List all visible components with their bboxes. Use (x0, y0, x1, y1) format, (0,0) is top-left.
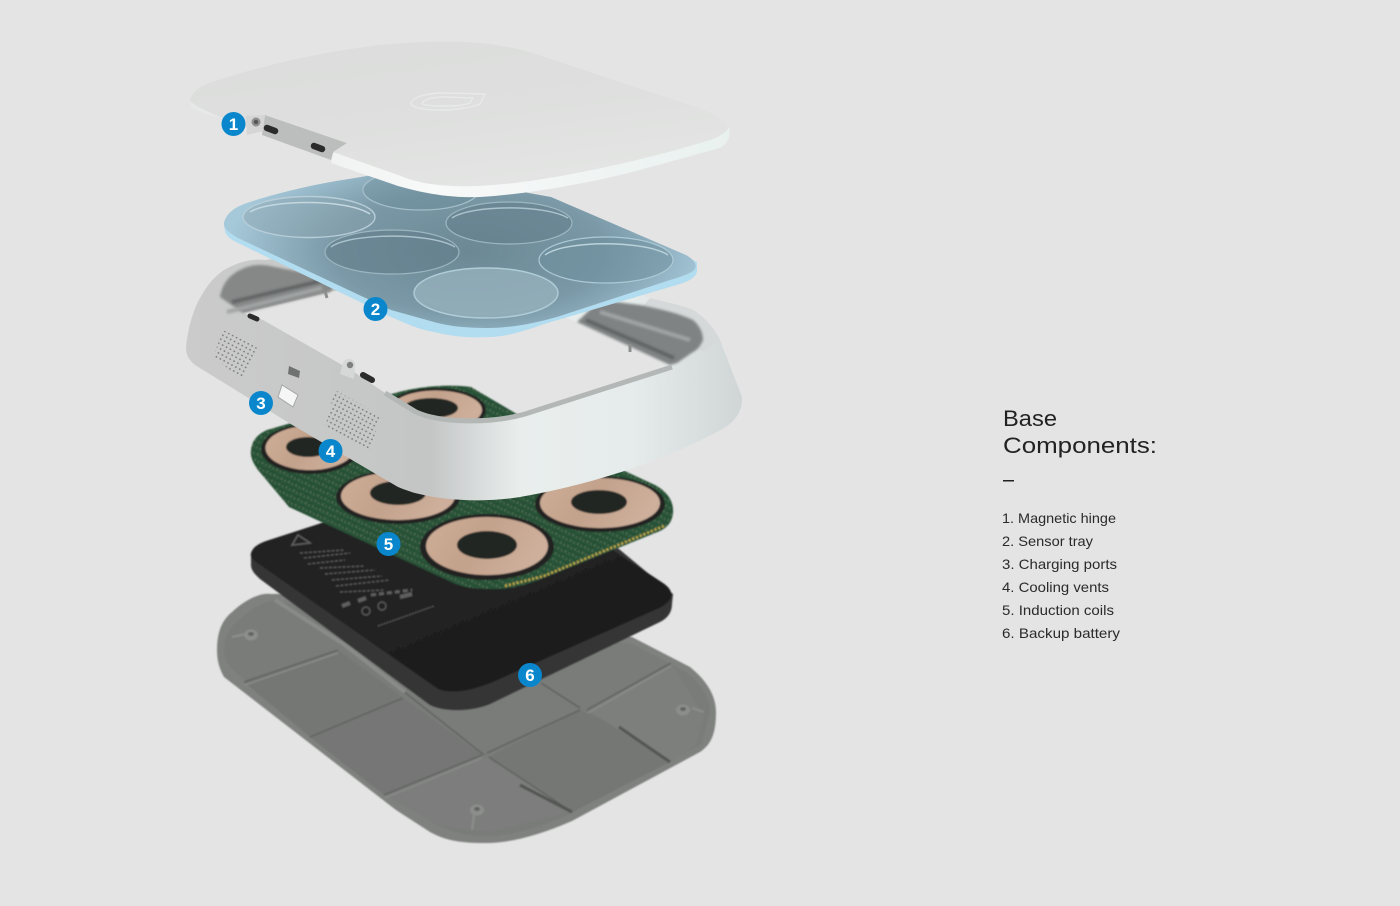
tray sensor circle 5 (539, 237, 673, 283)
hinge barrel (340, 359, 355, 379)
charging port large (278, 385, 298, 407)
coil: left (261, 424, 359, 474)
coil: back (386, 388, 486, 432)
tray sensor circle 1 (243, 196, 375, 238)
tray sensor circle 2 (363, 170, 479, 210)
part 3 and 4: frame with charging ports and cooling vents (186, 235, 742, 500)
tray surface (224, 170, 696, 328)
frame wall grooves (232, 280, 674, 358)
badge 1 (222, 112, 246, 136)
lid surface (190, 42, 728, 186)
tray edge (224, 178, 697, 337)
coil: middle (336, 470, 460, 524)
ribs (244, 645, 671, 812)
battery side (251, 500, 673, 710)
frame inner lip (385, 367, 672, 421)
hinge pin 2 (314, 146, 322, 149)
tray sensor circle 6 (414, 268, 558, 318)
badge 3 (249, 391, 273, 415)
part 6: bottom cover (217, 590, 716, 843)
badge 3: 3 (256, 394, 266, 413)
cooling vent left (213, 330, 257, 380)
badge 2 (364, 297, 388, 321)
logo emboss (411, 93, 485, 110)
coil: right (535, 476, 665, 532)
bottom cover body (217, 590, 716, 843)
compartment panels (244, 650, 403, 737)
coil: front (420, 514, 554, 580)
badge 5 (376, 532, 400, 556)
component list: 3. Charging ports (1002, 556, 1117, 572)
component list: 4. Cooling vents (1002, 579, 1109, 595)
battery top (251, 515, 671, 692)
part 5: induction coils board (251, 386, 673, 589)
hinge pin left (250, 316, 257, 319)
component list: 5. Induction coils (1002, 602, 1114, 618)
screw bosses (244, 630, 258, 640)
frame inner back wall left (220, 265, 340, 313)
badge 6: 6 (525, 666, 535, 685)
hinge recess (262, 115, 347, 160)
hinge pin right (363, 375, 372, 380)
heading: Base (1003, 406, 1057, 431)
circuit board (251, 386, 673, 589)
lid edge (190, 100, 730, 197)
part 1: lid with magnetic hinge (190, 42, 730, 197)
frame clips (325, 291, 630, 352)
heading (1003, 406, 1157, 458)
heading dash (1003, 480, 1014, 482)
part 2: sensor tray (224, 170, 697, 337)
component list: 6. Backup battery (1002, 625, 1120, 641)
battery label markings (292, 535, 434, 626)
component list (1002, 510, 1120, 641)
tray sensor circle 4 (325, 230, 459, 274)
badge 2: 2 (371, 300, 380, 319)
badge 6 (518, 663, 542, 687)
badge 4: 4 (326, 442, 336, 461)
tray sensor circle 3 (446, 202, 572, 244)
part 6: backup battery (251, 500, 673, 710)
badge 1: 1 (229, 115, 238, 134)
hinge socket (246, 115, 265, 135)
heading: Components: (1003, 433, 1157, 458)
ridge beside battery (275, 600, 405, 692)
badge 4 (318, 439, 342, 463)
charging port small (288, 366, 300, 378)
badge 5: 5 (384, 535, 393, 554)
hinge pin 1 (267, 128, 275, 131)
gold contacts (505, 526, 664, 586)
component list: 2. Sensor tray (1002, 533, 1093, 549)
component list: 1. Magnetic hinge (1002, 510, 1116, 526)
frame outer body with open centre (186, 235, 742, 500)
cooling vent right (325, 390, 380, 452)
frame inner back wall right (577, 300, 703, 365)
frame right rim (640, 298, 720, 352)
